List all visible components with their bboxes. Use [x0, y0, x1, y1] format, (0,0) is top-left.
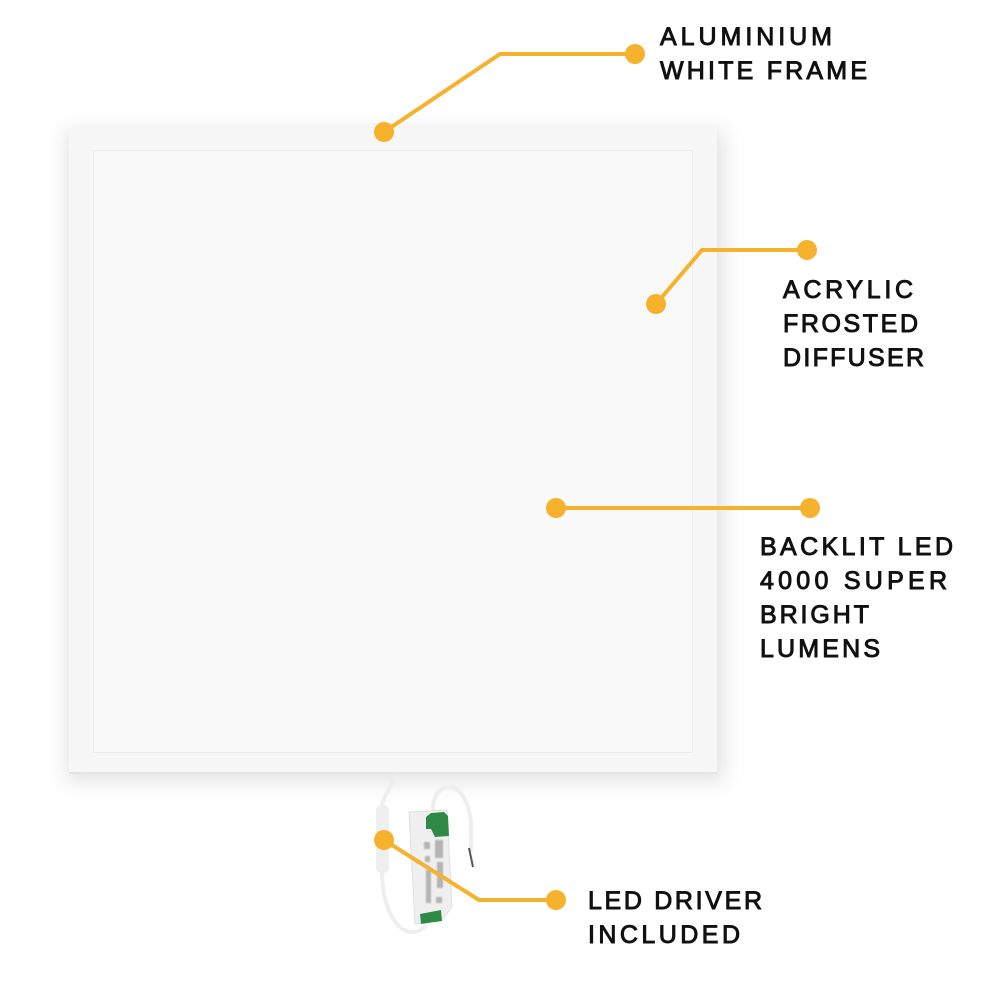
leader line: [646, 240, 817, 314]
callout: acrylic frosted diffuser: [646, 240, 924, 372]
label: [783, 276, 924, 372]
leader line: [546, 498, 820, 518]
label: INCLUDED: [588, 921, 740, 949]
label: BRIGHT: [760, 601, 869, 629]
label: LUMENS: [760, 635, 880, 663]
label: BACKLIT LED: [760, 533, 953, 561]
driver cable: [382, 777, 471, 932]
leader line: [374, 830, 566, 910]
driver label: [424, 840, 443, 903]
green terminal bottom: [420, 910, 442, 924]
green terminal top: [426, 812, 449, 837]
label: WHITE FRAME: [660, 57, 867, 85]
leader line: [374, 44, 645, 142]
label: [588, 887, 762, 949]
label: FROSTED: [783, 310, 918, 338]
panel shadow: [66, 130, 724, 782]
callout: aluminium white frame: [374, 23, 867, 142]
acrylic frosted diffuser: [94, 150, 692, 752]
label: DIFFUSER: [783, 344, 924, 372]
LED panel: [69, 128, 717, 774]
label: ACRYLIC: [783, 276, 913, 304]
callout: LED driver included: [374, 830, 762, 949]
callout: backlit LED: [546, 498, 953, 663]
driver body: [409, 810, 452, 924]
aluminium white frame: [69, 128, 717, 774]
driver connector: [376, 805, 389, 873]
label: [660, 23, 867, 85]
wire end: [469, 848, 473, 867]
label: LED DRIVER: [588, 887, 762, 915]
label: 4000 SUPER: [760, 567, 947, 595]
label: [760, 533, 953, 663]
LED driver: [376, 777, 473, 932]
label: ALUMINIUM: [660, 23, 832, 51]
